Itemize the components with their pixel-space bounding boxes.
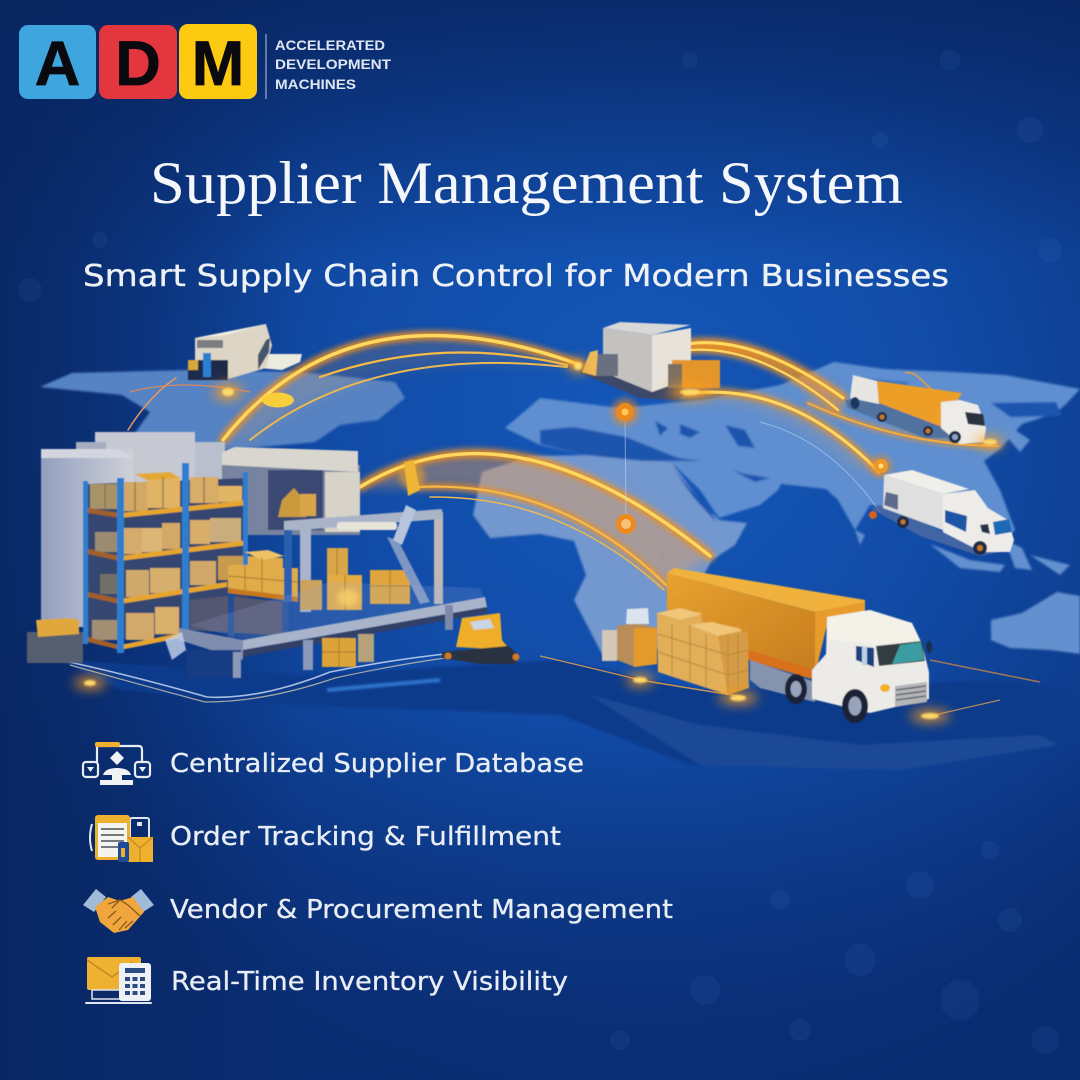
feature label: Centralized Supplier Database [170,749,584,779]
cab [812,610,932,713]
warm haze beneath the arcs [223,336,879,585]
logo tile D: D [115,29,161,99]
feature: centralized supplier database [83,742,584,785]
conveyor platform [165,582,487,678]
boxes on shelf 4 [92,607,179,640]
logo tile M [179,24,257,99]
shelving rack [83,463,248,653]
logo tile A [19,25,96,99]
icon: handshake [83,889,154,933]
warehouse building top centre [578,322,720,400]
logo tile M: M [192,29,244,99]
logo wordmark: MACHINES [275,77,356,92]
feature: vendor and procurement [83,889,673,933]
boxes on shelf 2 [95,518,241,554]
route node markers [262,392,892,534]
feature list [83,742,673,1004]
feature label: Order Tracking & Fulfillment [170,822,561,852]
boxes on shelf 1 [90,472,242,511]
thin white routes [625,412,880,524]
wheels [785,674,868,723]
container [667,568,865,675]
logo [19,24,392,99]
logo wordmark: DEVELOPMENT [275,57,392,72]
building blocks [41,432,360,627]
landmass: africa [473,455,747,660]
inland seas [540,378,1062,522]
icon: envelope and calculator [85,957,152,1004]
yellow truck upper right [845,372,986,444]
arcs core [128,336,998,590]
crate on the left [27,618,83,663]
yellow AGV robot [442,613,520,664]
logo tile D [99,25,177,99]
icon: clipboard and parcel [90,815,153,862]
robot arm [387,460,430,604]
feature: order tracking [90,815,561,862]
title: Supplier Management System [150,150,903,216]
subtitle: Smart Supply Chain Control for Modern Businesses [83,259,949,294]
white truck right [869,470,1014,556]
icon: network of people [83,742,150,785]
chassis [748,650,870,712]
feature label: Real-Time Inventory Visibility [171,967,568,997]
small cabinet and screen [602,608,657,667]
islands [660,420,1070,575]
feature: real-time inventory [85,957,568,1004]
carton stack [657,608,749,695]
world map [40,362,1080,770]
floor light trails [60,654,1040,716]
landmass: australia [991,592,1080,654]
landmass: north america [40,370,405,450]
feature label: Vendor & Procurement Management [170,895,673,925]
warehouse with shelves and conveyor [27,432,487,678]
logo wordmark: ACCELERATED [275,38,385,53]
big orange truck with cartons [602,568,932,723]
landmass: eurasia [505,362,1080,550]
arcs glow [223,336,998,585]
logo tile A: A [35,29,80,99]
gantry frame [284,509,443,612]
route arcs [128,336,998,590]
boxes on shelf 3 [100,556,243,597]
rack posts [83,463,248,653]
shelf planks [88,500,248,650]
pallet stack [190,550,298,638]
floor shadow land [60,660,1070,770]
small van top left [188,324,302,380]
glow spots [74,359,1004,722]
stacked cartons [300,548,410,610]
logo wordmark [275,38,392,92]
